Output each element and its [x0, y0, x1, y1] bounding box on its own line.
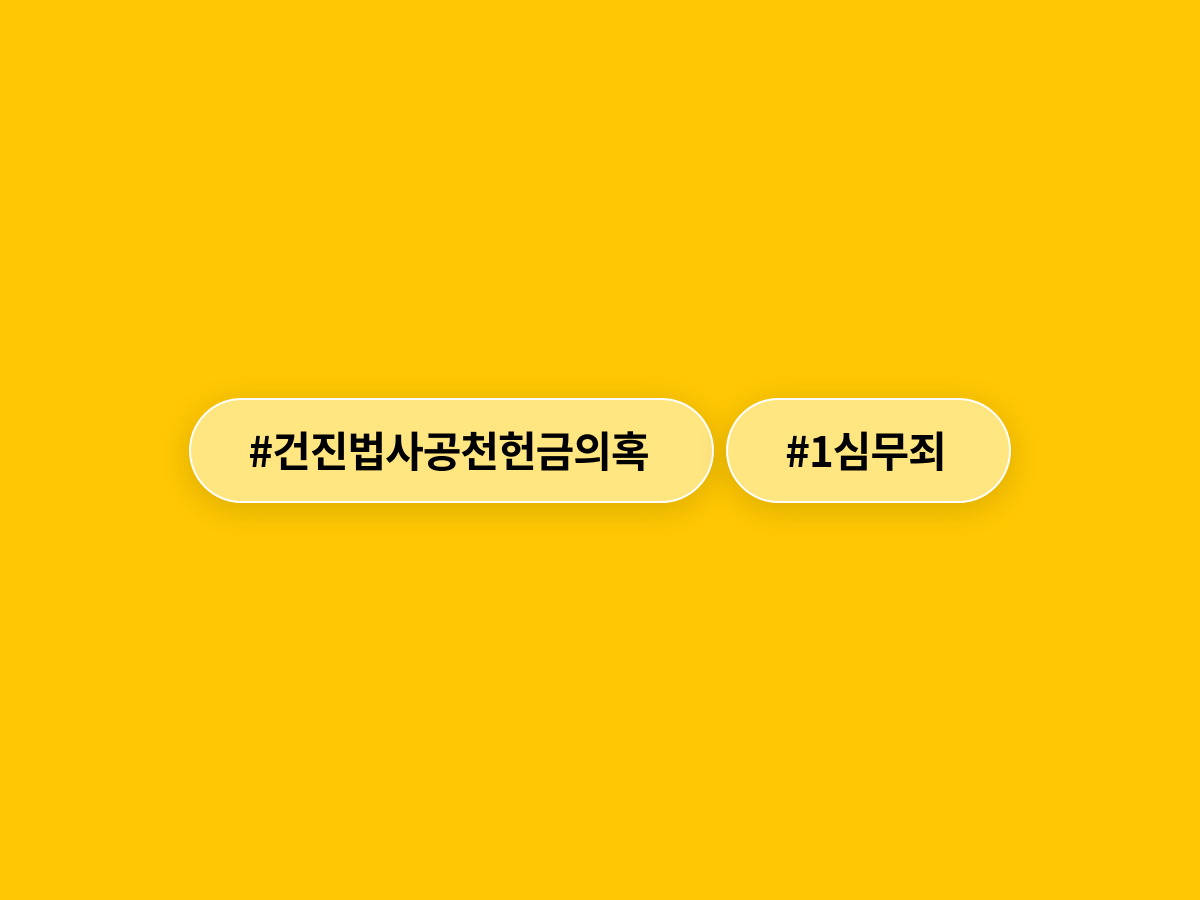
hashtag pill: 건진법사공천헌금의혹	[189, 398, 714, 503]
hashtag pill: 1심무죄: #1심무죄	[785, 419, 946, 480]
hashtag pill: 1심무죄	[726, 398, 1011, 503]
hashtag pill: 건진법사공천헌금의혹: #건진법사공천헌금의혹	[248, 419, 649, 480]
